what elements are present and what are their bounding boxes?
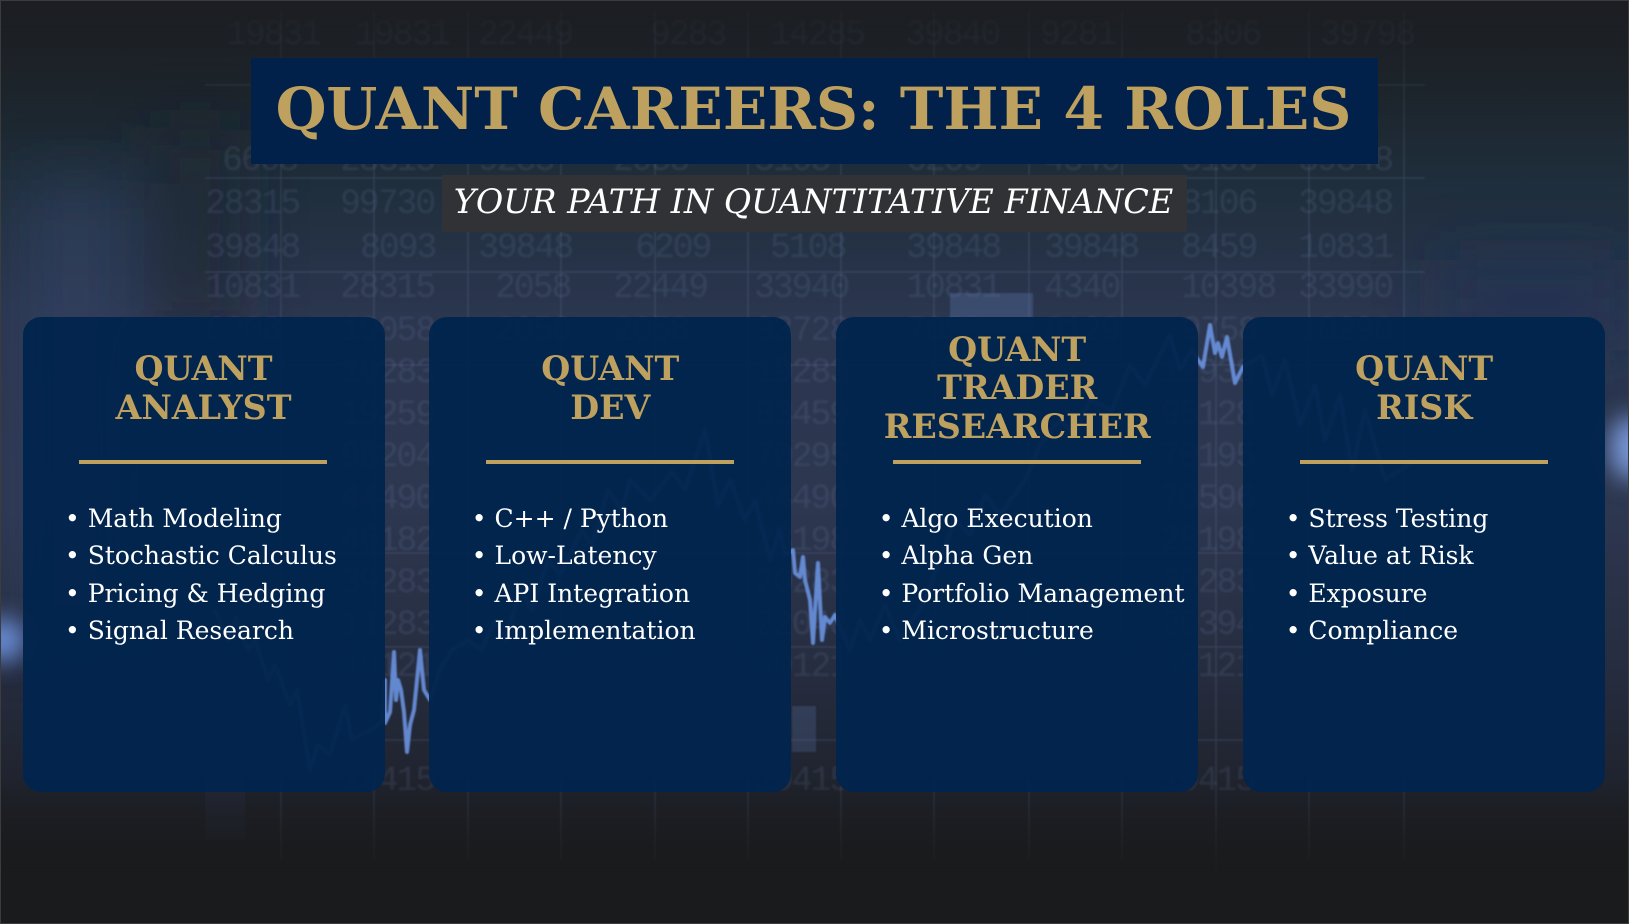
numbers grid: 5108 bbox=[754, 184, 829, 224]
list: Quant Risk skills bbox=[1286, 504, 1488, 645]
numbers grid: 19831 bbox=[355, 15, 450, 55]
numbers grid: 19058 bbox=[340, 311, 434, 351]
heading: Quant Analyst: ANALYST bbox=[116, 388, 291, 426]
list: Quant Risk skills: • Value at Risk bbox=[1286, 541, 1474, 570]
gold divider bbox=[79, 460, 327, 464]
background bars bbox=[205, 293, 1033, 840]
numbers grid: 70195 bbox=[1160, 437, 1254, 477]
list: Quant Dev skills: • Implementation bbox=[472, 616, 696, 645]
numbers grid: 83459 bbox=[754, 395, 848, 435]
numbers grid: 14285 bbox=[770, 15, 864, 55]
numbers grid: 10831 bbox=[1298, 228, 1393, 268]
numbers grid: 33728 bbox=[754, 311, 848, 351]
numbers grid: 33990 bbox=[1298, 268, 1392, 308]
numbers grid: 20283 bbox=[1160, 563, 1254, 603]
numbers grid: 6209 bbox=[635, 228, 710, 268]
numbers grid: 19831 bbox=[226, 15, 321, 55]
list: Quant Analyst skills: • Stochastic Calculus bbox=[65, 541, 337, 570]
price line chart bbox=[215, 325, 1415, 770]
numbers grid: 8106 bbox=[1181, 141, 1256, 181]
numbers grid: 44490 bbox=[340, 479, 434, 519]
numbers grid: 20283 bbox=[754, 563, 848, 603]
heading: Quant Trader Researcher bbox=[884, 330, 1151, 446]
numbers grid: 33940 bbox=[906, 184, 1000, 224]
list: Quant Analyst skills bbox=[65, 504, 337, 645]
numbers grid: 19283 bbox=[340, 353, 434, 393]
heading: Quant Risk: QUANT bbox=[1355, 349, 1493, 388]
heading: Quant Analyst: QUANT bbox=[134, 349, 273, 388]
numbers grid: 8129 bbox=[1044, 311, 1119, 351]
list: Quant Trader Researcher skills: • Alpha Gen bbox=[879, 541, 1033, 570]
title banner bbox=[251, 58, 1378, 164]
list: Quant Analyst skills: • Signal Research bbox=[65, 616, 294, 645]
heading: Quant Trader Researcher: TRADER bbox=[937, 368, 1097, 407]
heading: Quant Dev bbox=[541, 349, 679, 426]
heading: Quant Risk: RISK bbox=[1376, 388, 1472, 426]
panel: Quant Analyst bbox=[22, 317, 384, 792]
numbers grid: 6608 bbox=[222, 141, 297, 181]
list: Quant Risk skills: • Stress Testing bbox=[1286, 504, 1488, 533]
list: Quant Trader Researcher skills: • Microstructure bbox=[879, 616, 1094, 645]
numbers grid: 39848 bbox=[1298, 184, 1392, 224]
numbers grid: 99730 bbox=[340, 184, 434, 224]
numbers grid: 28315 bbox=[205, 184, 299, 224]
list: Quant Dev skills: • API Integration bbox=[472, 579, 690, 608]
numbers grid: 28315 bbox=[340, 141, 434, 181]
numbers grid: 6209 bbox=[613, 184, 688, 224]
numbers grid: 19259 bbox=[340, 395, 434, 435]
numbers grid: 95128 bbox=[1160, 395, 1254, 435]
numbers grid: 11283 bbox=[340, 605, 434, 645]
numbers grid: 19415 bbox=[340, 761, 434, 801]
heading: Quant Trader Researcher: RESEARCHER bbox=[884, 407, 1151, 446]
numbers grid: 39848 bbox=[906, 228, 1000, 268]
numbers grid: 8306 bbox=[1185, 15, 1260, 55]
numbers grid: 6208 bbox=[205, 311, 280, 351]
numbers grid: 2058 bbox=[613, 311, 688, 351]
numbers grid: 22048 bbox=[754, 605, 848, 645]
numbers grid: 19283 bbox=[754, 353, 848, 393]
list: Quant Dev skills bbox=[472, 504, 696, 645]
numbers grid: 4340 bbox=[1044, 141, 1119, 181]
numbers grid: 2058 bbox=[613, 141, 688, 181]
list: Quant Analyst skills: • Pricing & Hedging bbox=[65, 579, 325, 608]
numbers grid: 9281 bbox=[1040, 15, 1116, 55]
numbers grid: 33940 bbox=[754, 268, 848, 308]
gold divider bbox=[486, 460, 734, 464]
numbers grid bbox=[205, 15, 1414, 801]
numbers grid: 6209 bbox=[906, 141, 981, 181]
panel: Quant Trader Researcher bbox=[836, 317, 1198, 792]
numbers grid: 8106 bbox=[1181, 184, 1256, 224]
list: Quant Risk skills: • Exposure bbox=[1286, 579, 1427, 608]
numbers grid: 39848 bbox=[478, 228, 572, 268]
numbers grid: 40121 bbox=[754, 647, 849, 687]
title banner: QUANT CAREERS: THE 4 ROLES bbox=[276, 74, 1351, 143]
list: Quant Risk skills: • Compliance bbox=[1286, 616, 1458, 645]
heading: Quant Trader Researcher: QUANT bbox=[948, 330, 1086, 369]
panel: Quant Risk bbox=[1243, 317, 1605, 792]
numbers grid: 22449 bbox=[613, 268, 707, 308]
numbers grid: 9758 bbox=[1181, 311, 1256, 351]
numbers grid: 5108 bbox=[754, 141, 829, 181]
subtitle banner bbox=[442, 175, 1187, 232]
numbers grid: 2058 bbox=[495, 268, 570, 308]
numbers grid: 10831 bbox=[205, 268, 300, 308]
numbers grid: 10398 bbox=[1181, 268, 1275, 308]
gold divider bbox=[893, 460, 1141, 464]
list: Quant Trader Researcher skills bbox=[879, 504, 1184, 645]
numbers grid: 39798 bbox=[1320, 15, 1414, 55]
numbers grid: 39840 bbox=[905, 15, 999, 55]
numbers grid: 19415 bbox=[754, 761, 848, 801]
heading: Quant Analyst bbox=[115, 349, 292, 426]
numbers grid: 70596 bbox=[1160, 479, 1254, 519]
numbers grid: 8093 bbox=[360, 228, 435, 268]
numbers grid: 44490 bbox=[754, 479, 848, 519]
numbers grid: 2058 bbox=[495, 311, 570, 351]
gold divider bbox=[1300, 460, 1548, 464]
numbers grid: 28315 bbox=[340, 268, 434, 308]
numbers grid: 28198 bbox=[1160, 521, 1254, 561]
list: Quant Trader Researcher skills: • Algo Execution bbox=[879, 504, 1093, 533]
heading: Quant Dev: QUANT bbox=[541, 349, 679, 388]
numbers grid: 40121 bbox=[340, 647, 435, 687]
numbers grid: 98204 bbox=[340, 437, 435, 477]
list: Quant Dev skills: • C++ / Python bbox=[472, 504, 668, 533]
numbers grid: 12938 bbox=[1160, 353, 1254, 393]
numbers grid: 8459 bbox=[1181, 228, 1256, 268]
numbers grid: 5108 bbox=[770, 228, 845, 268]
list: Quant Dev skills: • Low-Latency bbox=[472, 541, 657, 570]
numbers grid: 9283 bbox=[650, 15, 725, 55]
numbers grid: 28198 bbox=[754, 521, 848, 561]
numbers grid: 39848 bbox=[1298, 141, 1392, 181]
numbers grid: 46182 bbox=[340, 521, 434, 561]
list: Quant Analyst skills: • Math Modeling bbox=[65, 504, 282, 533]
numbers grid: 10398 bbox=[1044, 184, 1138, 224]
numbers grid: 22449 bbox=[478, 15, 572, 55]
heading: Quant Risk bbox=[1355, 349, 1493, 426]
numbers grid: 19415 bbox=[1160, 761, 1254, 801]
numbers grid: 39848 bbox=[1044, 228, 1138, 268]
numbers grid: 4340 bbox=[1044, 268, 1119, 308]
numbers grid: 40121 bbox=[1160, 647, 1255, 687]
numbers grid: 20394 bbox=[1160, 605, 1255, 645]
numbers grid: 39848 bbox=[205, 228, 299, 268]
numbers grid: 39283 bbox=[340, 563, 434, 603]
numbers grid: 9283 bbox=[478, 141, 553, 181]
panel: Quant Dev bbox=[429, 317, 791, 792]
list: Quant Trader Researcher skills: • Portfolio Management bbox=[879, 579, 1184, 608]
numbers grid: 2058 bbox=[478, 184, 553, 224]
grid lines bbox=[205, 10, 1425, 880]
subtitle banner: YOUR PATH IN QUANTITATIVE FINANCE bbox=[454, 182, 1173, 221]
numbers grid: 7058 bbox=[906, 311, 981, 351]
numbers grid: 10290 bbox=[1298, 311, 1392, 351]
numbers grid: 10831 bbox=[906, 268, 1001, 308]
heading: Quant Dev: DEV bbox=[570, 388, 650, 426]
numbers grid: 70295 bbox=[754, 437, 848, 477]
